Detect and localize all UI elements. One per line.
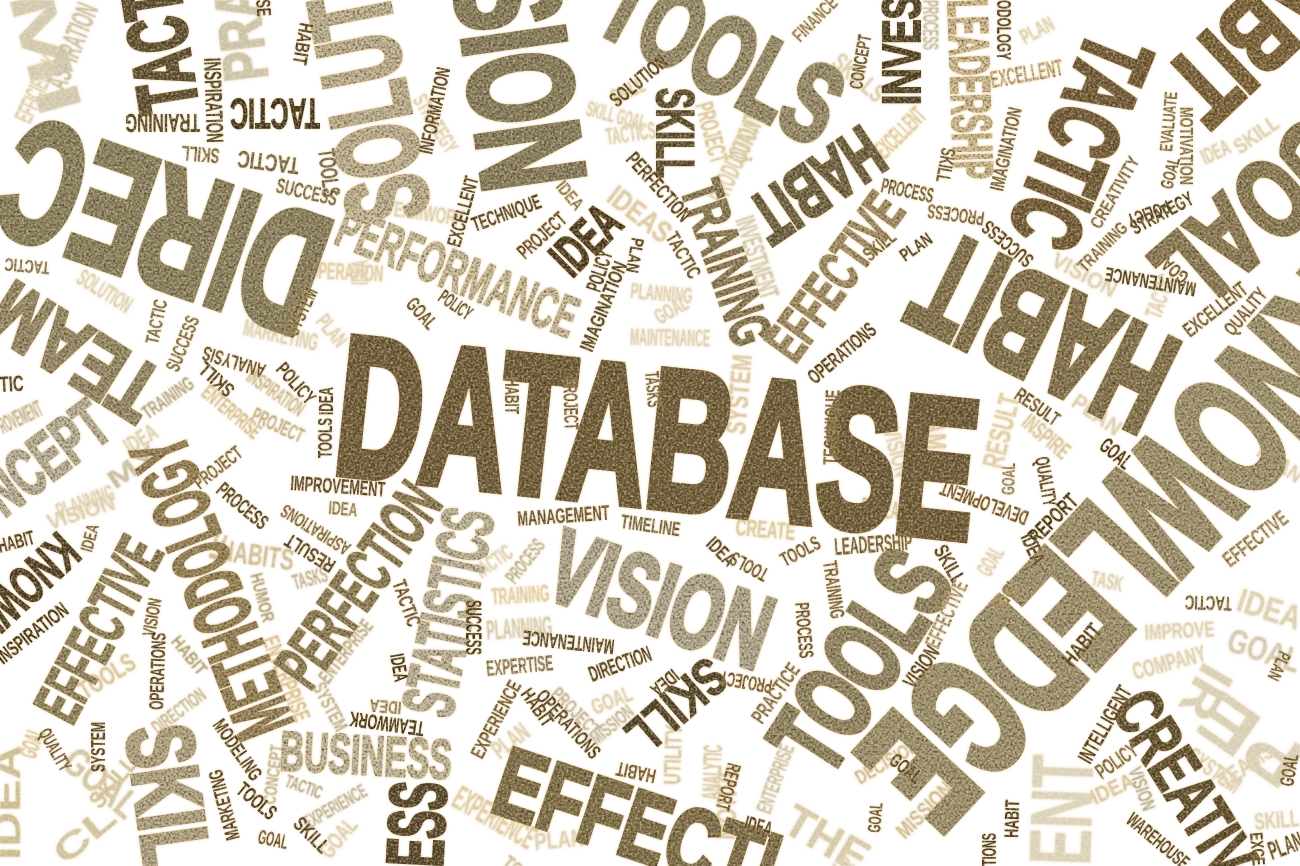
small dark words: EXCELLENT (1179, 278, 1252, 342)
small dark words: TRAINING (125, 108, 200, 138)
small dark words: POLICY (581, 247, 618, 295)
word: TACTIC right: TACTIC (988, 19, 1173, 264)
small dark words: TACTIC (142, 297, 172, 346)
pale background words: TRAINING (491, 580, 550, 611)
pale background words: ENTERPRISE (315, 615, 378, 688)
pale background words: SYSTEM (1182, 743, 1246, 799)
small dark words: EVALUATE (1156, 91, 1181, 152)
word: IDEA: IDEA (539, 193, 634, 287)
pale background words: SKILLS (826, 47, 891, 108)
pale background words: ENT (1010, 753, 1113, 866)
small dark words: POLICY (1091, 737, 1143, 784)
word: HABIT: HABIT (889, 202, 1199, 463)
small dark words: TIONS (979, 833, 1001, 866)
small dark words: VISION (139, 597, 167, 638)
pale background words: SOLUTION (72, 264, 137, 319)
small dark words: TRAINING (818, 560, 848, 620)
pale background words: QUALITY (722, 100, 771, 167)
small dark words: TACTIC (661, 228, 705, 283)
small dark words: MOTIVATION (1176, 107, 1196, 185)
small dark words: SUCCESS (274, 174, 339, 211)
small dark words: TECHNIQUE (469, 190, 544, 237)
pale background words: TASKS (290, 562, 330, 595)
pale background words: PROJECT (689, 99, 734, 166)
small dark words: REPORT (1023, 488, 1083, 549)
small dark words: IMAGINATION (986, 105, 1027, 193)
pale background words: INSPIRATION (242, 364, 310, 421)
pale background words: CONCEPT (259, 743, 287, 806)
small dark words: IDEA (1015, 529, 1050, 568)
pale background words: PLANNING (485, 610, 553, 646)
small dark words: SYSTEM (282, 285, 323, 339)
word: EFFECTIVE left: EFFECTIVE (20, 524, 177, 734)
small dark words: MAINTENANCE (1103, 262, 1198, 300)
word: ESS: ESS (370, 779, 463, 866)
pale background words: DIRECTION (148, 684, 211, 739)
small dark words: IDEA (385, 652, 412, 683)
small dark words: POLICY (271, 359, 320, 409)
pale background words: DECISION (852, 735, 923, 789)
small dark words: QUALITY (1030, 455, 1060, 508)
pale background words: MISSION (586, 701, 639, 750)
pale background words: PLAN (533, 825, 585, 856)
small dark words: PROCESS (790, 602, 817, 659)
small dark words: PRACTICE (747, 659, 805, 728)
pale background words: HABIT (167, 632, 211, 679)
small dark words: SUCCESS (461, 600, 486, 655)
pale background words: PLAN (485, 716, 535, 765)
small dark words: GOAL (1157, 155, 1184, 191)
small dark words: VISION (898, 641, 944, 693)
small dark words: ODOLOGY (992, 0, 1014, 60)
small dark words: OPERATIONS (146, 632, 171, 710)
pale background words: COMPANY (1130, 640, 1209, 686)
pale background words: PLANNING (53, 480, 118, 526)
small dark words: PLAN (896, 229, 936, 265)
pale background words: TACTIC (283, 771, 325, 803)
small dark words: SKILL (929, 541, 970, 589)
word: TACTIC upside down: TACTIC (230, 89, 320, 137)
pale background words: TEAM (919, 394, 952, 450)
pale background words: RESEARCH (859, 491, 924, 529)
pale background words: MY (101, 439, 163, 495)
pale background words: TACTICS (604, 117, 657, 151)
word: SKILL dark: SKILL (614, 646, 738, 765)
small dark words: PROJECT (719, 666, 774, 697)
pale background words: TASK (1089, 565, 1126, 597)
pale background words: PLANNING (630, 278, 694, 308)
pale background words: MISSION (891, 776, 958, 844)
pale background words: IMPROVE (1144, 616, 1215, 645)
pale background words: PLAN (311, 309, 353, 352)
pale background words: SKILL (1229, 110, 1284, 159)
small dark words: CREATIVITY (1086, 153, 1143, 232)
small dark words: IDEA (701, 533, 740, 571)
pale background words: GOAL (650, 290, 693, 329)
small dark words: IDEA (984, 577, 1022, 618)
pale background words: IDEA (1087, 768, 1138, 810)
pale background words: IF (202, 529, 240, 567)
small dark words: TOOLS (315, 418, 337, 458)
pale background words: IDEA (1197, 134, 1234, 170)
small dark words: STRATEGY (1127, 188, 1198, 239)
word: EFFECTIVE centre: EFFECTIVE (753, 181, 917, 373)
small dark words: GOAL (256, 826, 290, 854)
pale background words: UTILITY (659, 724, 688, 785)
small dark words: IDEA (316, 387, 338, 415)
small dark words: EXPERTISE (485, 650, 554, 681)
small dark words: REPORT (711, 761, 744, 813)
pale background words: PROJECT (546, 684, 604, 741)
small dark words: DIRECTION (585, 641, 655, 687)
small dark words: EFFECTIVE (920, 576, 973, 652)
small dark words: QUALITY (34, 725, 75, 775)
pale background words: IDEA (347, 260, 374, 285)
pale background words: IDEA (119, 419, 163, 460)
word: TRAINING: TRAINING (668, 172, 785, 354)
small dark words: GOAL (1152, 248, 1193, 287)
pale background words: SKILL (607, 72, 649, 110)
small dark words: TOOLS (312, 147, 345, 198)
small dark words: SOLUTION (605, 51, 672, 112)
pale background words: ENTERPRISE (751, 741, 799, 817)
small dark words: QUALITY (1220, 284, 1272, 340)
small dark words: POLICY (1124, 195, 1172, 230)
small dark words: OPERATIONS (531, 686, 605, 764)
pale background words: HUMOR (246, 571, 278, 624)
word: SKILL top: SKILL (645, 88, 704, 178)
small dark words: ASPIRATIONS (277, 499, 355, 559)
word: PERFORMANCE: PERFORMANCE (327, 195, 588, 351)
small dark words: SKILL (180, 141, 220, 167)
small dark words: EXPERIENCE (467, 677, 526, 762)
pale background words: VISION (1048, 247, 1121, 302)
pale background words: PROCESS (918, 0, 943, 50)
pale background words: TRAINING (138, 373, 198, 424)
small dark words: TACTIC (387, 577, 424, 630)
pale background words: SKILL GOAL (584, 96, 648, 135)
small dark words: MAINTENANCE (522, 625, 616, 658)
small dark words: TACTIC (1184, 590, 1232, 614)
pale background words: ENTERPRISE (197, 380, 266, 444)
pale background words: RESULT (977, 391, 1027, 472)
small dark words: GOAL (885, 750, 926, 788)
small dark words: SYSTEM (88, 722, 110, 772)
pale background words: IR (1168, 654, 1244, 730)
small dark words: HABIT (500, 378, 522, 414)
pale background words: PLAN (1067, 389, 1127, 441)
small dark words: GOAL (864, 802, 887, 833)
pale background words: PROCESS (502, 535, 550, 588)
small dark words: PROJECT (558, 377, 582, 430)
pale background words: VISION (877, 425, 916, 480)
pale background words: TEAMS (1213, 737, 1279, 795)
pale background words: HABITS (217, 534, 296, 577)
pale background words: GOAL (972, 542, 1010, 581)
small dark words: TOOLS (727, 547, 772, 585)
small dark words: IDEA (328, 498, 358, 522)
small dark words: OPERATIONS (803, 319, 881, 389)
small dark words: TECHNIQUE (820, 389, 845, 465)
small dark words: MANAGEMENT (517, 502, 610, 531)
pale background words: GOAL (54, 739, 148, 828)
pale background words: GOAL (12, 724, 51, 762)
small dark words: DEVELOPMENT (937, 476, 1032, 529)
word: VISION: VISION (534, 508, 787, 692)
pale background words: TOOLS (72, 647, 141, 705)
small dark words: EXCELLENT (988, 55, 1065, 94)
small dark words: INFORMATION (415, 65, 455, 156)
small dark words: HABIT (1001, 799, 1024, 838)
small dark words: TIC (0, 371, 24, 397)
small dark words: INSPIRATION (198, 57, 228, 143)
small dark words: TASKS (640, 371, 665, 408)
small dark words: IMPROVEMENT (290, 472, 386, 502)
small dark words: HABIT (516, 685, 557, 731)
pale background words: GOAL (314, 812, 364, 864)
pale background words: PRODUCTION (702, 115, 768, 208)
small dark words: TOOLS (777, 532, 824, 571)
word: STATISTICS: STATISTICS (387, 501, 510, 723)
small dark words: GOAL (998, 462, 1019, 495)
small dark words: MODELING (208, 715, 266, 785)
small dark words: POLICY (434, 286, 477, 325)
small dark words: TIMELINE (619, 511, 682, 541)
word: TOOLS centre: TOOLS (746, 529, 977, 793)
pale background words: TACTIC (1140, 271, 1181, 322)
word: BUSINESS: BUSINESS (278, 719, 453, 791)
small dark words: TOOLS (232, 778, 281, 825)
small dark words: TACTIC (236, 144, 301, 179)
small dark words: PROCESS (879, 174, 936, 208)
small dark words: PERFECTION (621, 148, 695, 227)
small dark words: IDEA (646, 664, 683, 700)
small dark words: PLAN (1264, 648, 1295, 684)
pale background words: EXCELLENT (868, 101, 932, 164)
pale background words: STRATEGY (408, 89, 463, 158)
pale background words: ANALYTIC (696, 744, 728, 800)
pale background words: MAINTENANCE (630, 324, 710, 352)
small dark words: PROJECT (190, 442, 247, 494)
small dark words: MARKETING (205, 767, 245, 842)
small dark words: PROCESS (926, 199, 986, 229)
word: METHODOLOGY: METHODOLOGY (114, 424, 311, 750)
small dark words: PROJECT (513, 208, 572, 264)
small dark words: IDEA (742, 811, 775, 842)
pale background words: INSPIRE (1016, 409, 1076, 465)
small dark words: PLAN (622, 236, 648, 274)
large words: LEADERSHIP (936, 0, 1005, 180)
small dark words: IMAGINATION (576, 259, 632, 355)
pale background words: MARKETING (241, 314, 321, 357)
pale background words: VISION (1123, 764, 1159, 814)
pale background words: IDEAS (601, 180, 678, 250)
pale background words: SKILL (84, 751, 143, 814)
pale background words: EXPERIENCE (300, 780, 371, 834)
small dark words: IDEA (369, 695, 402, 718)
small dark words: IDEA (77, 522, 103, 554)
pale background words: CREATE (734, 514, 797, 546)
small dark words: PROCESS (212, 478, 273, 534)
small dark words: GOAL (1095, 433, 1138, 474)
pale background words: TEAMWORK (384, 195, 467, 231)
pale background words: PROJECT (248, 404, 308, 448)
small dark words: HABIT (614, 757, 658, 787)
pale background words: PLAN (1016, 11, 1058, 49)
small dark words: LEADERSHIP (834, 529, 913, 561)
pale background words: VISION (44, 489, 118, 535)
small dark words: INTELLIGENT (1073, 681, 1137, 768)
small dark words: ANALYSIS (200, 341, 268, 381)
small dark words: SKILL (859, 226, 901, 266)
pale background words: ENTERPRISE (256, 632, 315, 726)
small dark words: EXCELLENT (444, 174, 483, 249)
word: PERFECTION: PERFECTION (261, 469, 456, 701)
pale background words: MOTIVE (710, 764, 744, 840)
pale background words: SYSTEM (720, 353, 758, 436)
small dark words: RESULT (1010, 384, 1064, 431)
small dark words: SUCCESS (162, 313, 204, 375)
pale background words: SYSTEM (308, 679, 351, 735)
small dark words: HABIT (1057, 618, 1107, 671)
small dark words: TEAMWORK (348, 707, 426, 740)
pale background words: INVESTMENT (729, 212, 785, 303)
pale background words: GOAL (588, 681, 636, 720)
small dark words: TRAINING (1074, 218, 1132, 276)
pale background words: OPERATION (308, 257, 384, 288)
small dark words: SKILL (931, 146, 959, 184)
small dark words: GOAL (401, 294, 441, 334)
small dark words: SUCCESS (978, 216, 1038, 271)
pale background words: TACTIC (469, 539, 517, 584)
small dark words: SKILL (193, 356, 239, 401)
word: HABIT centre: HABIT (735, 111, 899, 260)
small dark words: RESULT (281, 529, 340, 576)
small dark words: HABIT (288, 21, 317, 66)
small dark words: IDEA (552, 177, 588, 214)
